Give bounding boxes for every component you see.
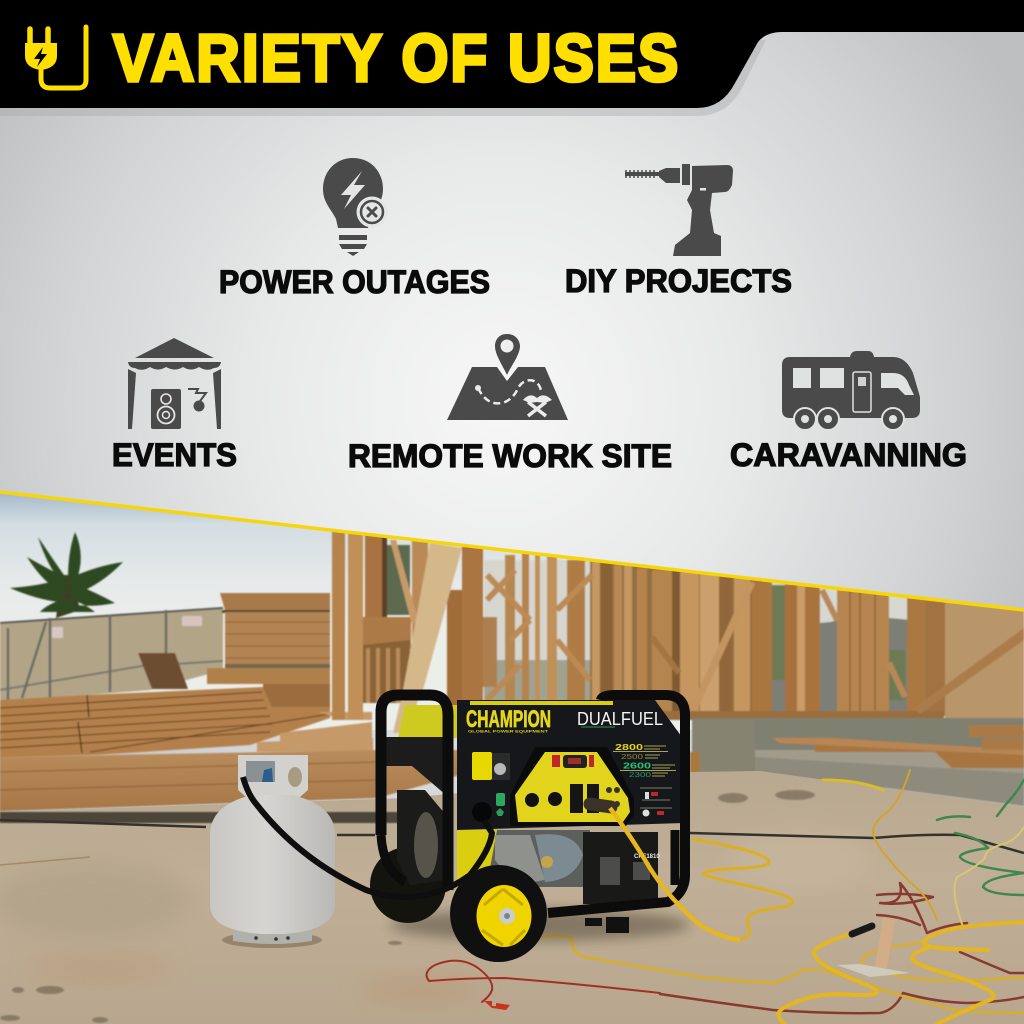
icon: map with pin and hammers [447,334,568,420]
buried dark cable [0,820,1024,853]
tank base [233,925,312,944]
champion logo: CHAMPION [466,706,551,733]
icon: motorhome [782,351,920,430]
title: VARIETY OF USES [113,20,678,96]
concrete foundation [692,718,1024,780]
battery: CPE1810 [634,854,660,860]
status indicators [640,788,672,816]
angled lumber stack [0,687,330,758]
wood framing [331,532,946,721]
ground [0,771,1024,1024]
diagonal braces [487,570,905,717]
label: POWER OUTAGES [219,264,490,300]
icon: event tent with speaker [128,338,221,429]
yellow control panel [510,747,634,826]
use: remote work site [348,334,672,474]
thick yellow cords [778,933,877,1024]
plug: red connector [484,1001,510,1010]
shadow [390,909,690,941]
label: REMOTE WORK SITE [348,438,672,474]
icon: light bulb with x [323,158,388,256]
left outlet box [472,752,510,780]
lumber stacks [207,593,330,708]
tank body [210,795,335,934]
green tags and round socket [472,793,505,822]
label: CARAVANNING [730,437,967,473]
funnel bracket [385,737,446,795]
plywood wall [945,600,1024,722]
sky [0,490,1024,730]
yellow power cord and plug [590,804,740,940]
wattage ratings: 2500 [621,754,643,761]
wattage ratings: 2800 [615,743,644,752]
generator [243,695,740,962]
paper scrap [837,964,910,977]
use: caravanning [730,351,967,473]
use: events [112,338,237,473]
tube frame [381,695,685,913]
wattage ratings: 2600 [623,762,652,770]
fuel hose [243,777,492,897]
form boards [772,738,1024,755]
leaning plank [393,543,462,733]
rear wheel [370,847,446,923]
loose boards [257,712,373,752]
champion logo [466,706,551,734]
engine [457,830,590,887]
ground texture [0,790,870,1023]
thin yellow cords [543,936,1024,1013]
dual fuel logo: DUALFUEL [577,709,663,729]
label: EVENTS [112,437,237,473]
sill plate [663,710,945,719]
icon: drill [625,164,733,256]
fence [0,608,223,702]
champion logo: GLOBAL POWER EQUIPMENT [468,728,549,734]
wattage ratings [613,743,676,779]
label: DIY PROJECTS [565,263,792,299]
use: diy projects [565,164,792,299]
generator yellow cord loop [693,839,793,941]
icon: plug [25,27,86,88]
green cables [937,780,1024,895]
construction backdrop [0,525,1024,806]
wood scrap [875,918,895,968]
distant hills and trees [387,545,912,720]
front lumber beam [0,750,460,811]
foot [585,917,629,933]
red extension cord [427,961,660,1002]
front wheel [450,865,547,962]
plug: black connector [852,926,872,934]
pallet [138,653,188,689]
control housing [457,700,684,830]
wattage ratings: 2300 [629,772,651,779]
recoil starter [397,790,446,885]
propane tank [210,755,335,948]
yellow diagonal divider [0,492,1024,610]
battery [583,832,660,904]
photo: construction site [0,490,1024,1024]
fuel tank [398,705,457,738]
use: power outages [219,158,490,300]
palm tree [10,532,123,618]
ground cables [427,770,1024,1024]
header banner [0,0,1024,116]
tank collar [238,755,308,797]
